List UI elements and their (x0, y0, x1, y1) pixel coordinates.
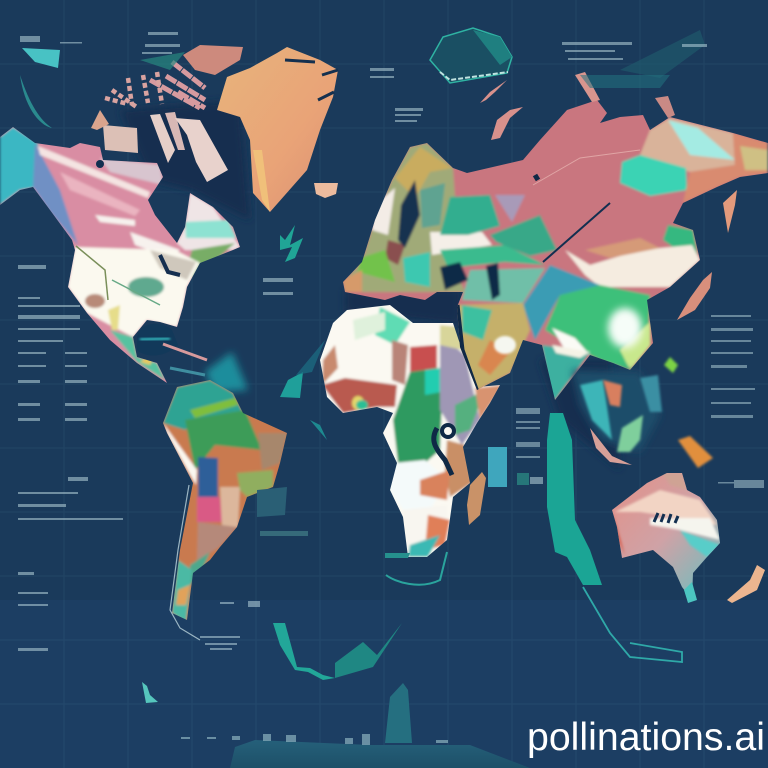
label block: Atlantic and Antarctic text (200, 278, 543, 650)
teal tower (385, 683, 412, 743)
continent: South America (160, 378, 290, 640)
text blocks: right margin labels (516, 315, 764, 488)
bottom glow block (230, 740, 530, 768)
teal globe (430, 28, 512, 83)
continent: Australia (612, 473, 720, 603)
island: New Zealand (727, 565, 765, 603)
islands: Canadian Arctic (91, 45, 243, 182)
island: Madagascar (467, 472, 486, 525)
watermark: pollinations.ai (527, 716, 765, 759)
text blocks: left margin labels (18, 265, 123, 651)
teal marks: Atlantic (257, 225, 327, 517)
small teal islet (142, 682, 158, 703)
region: Southeast Asia and islands (572, 357, 713, 468)
text blocks: top labels (20, 32, 707, 122)
teal crescent: Antarctica fragments (273, 623, 402, 680)
ocean arc line (583, 587, 682, 662)
continent: Africa (315, 300, 510, 585)
island: Iceland (314, 183, 338, 198)
Gulf of Mexico and Caribbean glow (137, 324, 248, 392)
teal data box (488, 447, 507, 487)
continent: North America (0, 120, 250, 390)
teal band (547, 413, 602, 585)
teal marks: upper ocean (20, 30, 705, 128)
dark water behind the northern coasts (120, 100, 620, 470)
continent: Eurasia (335, 90, 768, 410)
continent: Greenland (217, 47, 338, 212)
islands: Kamchatka, Japan and Arctic Russia (480, 72, 737, 320)
text marks: bottom row (181, 734, 448, 745)
